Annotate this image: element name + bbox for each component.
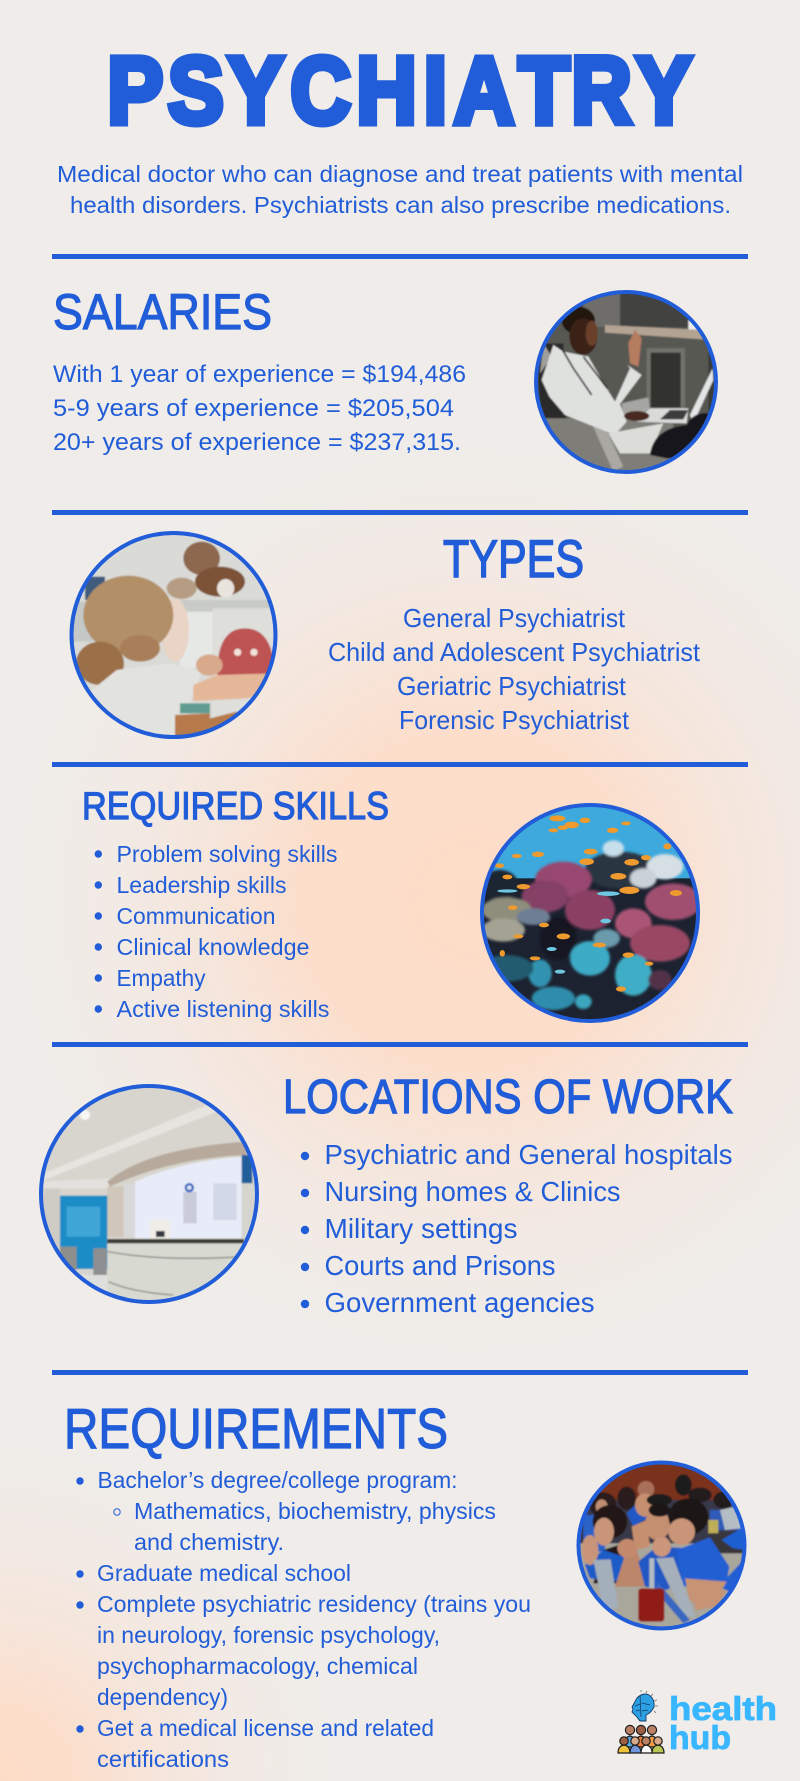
photo: child with card	[70, 531, 278, 739]
logo wordmark: hub	[669, 1719, 731, 1756]
photo: medical students in lecture	[576, 1460, 746, 1630]
intro text	[57, 161, 743, 218]
list of psychiatrist types: Child and Adolescent Psychiatrist	[328, 637, 701, 667]
photo: hospital reception	[39, 1084, 259, 1304]
heading: types: TYPES	[443, 530, 584, 589]
requirements list: and chemistry.	[134, 1529, 284, 1555]
skills list	[95, 841, 338, 1022]
skills list: Problem solving skills	[116, 841, 338, 867]
logo wordmark: health	[669, 1690, 777, 1727]
icon: group of people	[618, 1725, 664, 1753]
requirements list: Graduate medical school	[97, 1560, 351, 1586]
salary figures: 5-9 years of experience = $205,504	[53, 395, 454, 422]
skills list: Active listening skills	[116, 996, 330, 1022]
heading: locations of work: LOCATIONS OF WORK	[283, 1071, 733, 1124]
requirements list: Bachelor’s degree/college program:	[98, 1467, 458, 1493]
locations list: Psychiatric and General hospitals	[324, 1139, 732, 1170]
list of psychiatrist types: Geriatric Psychiatrist	[397, 671, 627, 701]
requirements list: psychopharmacology, chemical	[97, 1653, 418, 1679]
title: PSYCHIATRY	[107, 37, 692, 143]
icon: brain	[632, 1690, 658, 1721]
requirements list: Get a medical license and related	[97, 1715, 434, 1741]
panel: types	[60, 525, 701, 750]
logo wordmark	[669, 1690, 777, 1756]
panel: locations of work	[30, 1071, 733, 1318]
panel: required skills	[82, 785, 710, 1030]
requirements list: dependency)	[97, 1684, 228, 1710]
panel: requirements	[64, 1397, 770, 1772]
photo: coral reef	[480, 803, 700, 1023]
skills list: Leadership skills	[116, 872, 286, 898]
salary figures	[53, 361, 466, 456]
requirements list: certifications	[97, 1746, 229, 1772]
list of psychiatrist types: General Psychiatrist	[403, 603, 626, 633]
skills list: Empathy	[116, 965, 206, 991]
salary figures: 20+ years of experience = $237,315.	[53, 429, 461, 456]
skills list: Clinical knowledge	[116, 934, 310, 960]
list of psychiatrist types	[328, 603, 701, 735]
salary figures: With 1 year of experience = $194,486	[53, 361, 466, 388]
heading: salaries: SALARIES	[53, 284, 272, 340]
requirements list	[76, 1467, 531, 1772]
intro text: Medical doctor who can diagnose and treat patients with mental	[57, 161, 743, 187]
heading: requirements: REQUIREMENTS	[64, 1397, 448, 1461]
intro text: health disorders. Psychiatrists can also prescribe medications.	[70, 192, 731, 218]
locations list: Courts and Prisons	[324, 1250, 556, 1281]
locations list: Nursing homes & Clinics	[324, 1176, 620, 1207]
locations list	[301, 1139, 732, 1318]
list of psychiatrist types: Forensic Psychiatrist	[399, 705, 630, 735]
requirements list: Mathematics, biochemistry, physics	[134, 1498, 496, 1524]
panel: salaries	[53, 280, 730, 480]
requirements list: Complete psychiatric residency (trains you	[97, 1591, 531, 1617]
skills list: Communication	[116, 903, 276, 929]
logo: health hub	[618, 1690, 777, 1756]
locations list: Military settings	[324, 1213, 518, 1244]
locations list: Government agencies	[324, 1287, 594, 1318]
requirements list: in neurology, forensic psychology,	[97, 1622, 440, 1648]
heading: required skills: REQUIRED SKILLS	[82, 785, 389, 828]
photo: doctor on laptop	[534, 290, 718, 474]
